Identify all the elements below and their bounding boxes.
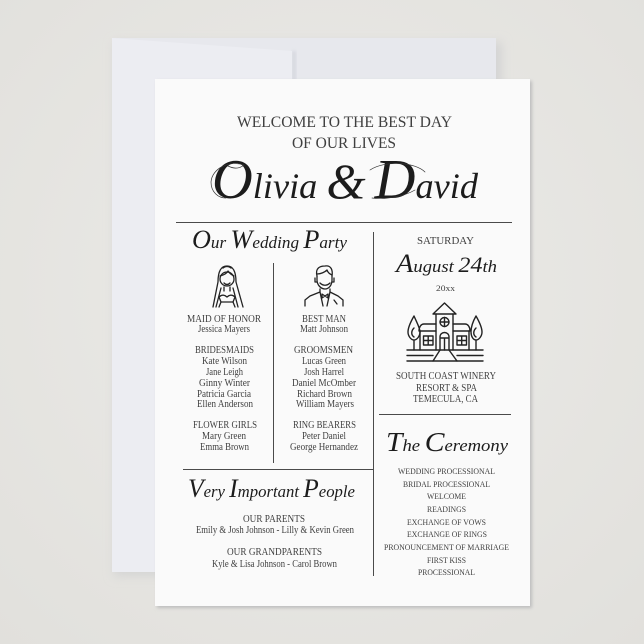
column: bride's party: Patricia Garcia (197, 389, 252, 400)
column: groom's party: William Mayers (296, 399, 354, 410)
heading: august 24th: August 24th (394, 249, 497, 278)
column: bride's party (187, 314, 261, 453)
panel: date and venue (394, 236, 497, 405)
list: ceremony order: EXCHANGE OF VOWS (407, 517, 486, 527)
column: groom's party: Richard Brown (297, 389, 352, 400)
column: groom's party (290, 314, 359, 453)
text: parents and grandparents: Kyle & Lisa Johnson - Carol Brown (212, 559, 337, 570)
text: venue address: RESORT & SPA (416, 383, 478, 394)
list: ceremony order: PROCESSIONAL (418, 567, 475, 577)
column: bride's party: Emma Brown (200, 442, 249, 453)
list: ceremony order: BRIDAL PROCESSIONAL (403, 479, 490, 489)
column: groom's party: BEST MAN (302, 314, 346, 325)
text: parents and grandparents: OUR GRANDPARENTS (227, 547, 322, 558)
heading: couple names: Olivia & David (212, 149, 479, 211)
icon: winery building (407, 303, 483, 361)
title: welcome: WELCOME TO THE BEST DAY (237, 114, 452, 131)
text: venue address (396, 371, 496, 405)
title: welcome (237, 114, 452, 152)
heading: our wedding party: Our Wedding Party (192, 225, 347, 254)
heading: the ceremony: The Ceremony (386, 427, 508, 457)
column: bride's party: Kate Wilson (202, 356, 247, 367)
column: groom's party: Daniel McOmber (292, 378, 357, 389)
column: groom's party: Josh Harrel (304, 367, 344, 378)
envelope (112, 38, 502, 576)
text: year: 20xx (436, 283, 456, 293)
column: bride's party: Jessica Mayers (198, 324, 250, 335)
text: venue address: SOUTH COAST WINERY (396, 371, 496, 382)
column: bride's party: Ellen Anderson (197, 399, 253, 410)
text: parents and grandparents (196, 514, 354, 570)
panel: the ceremony (384, 427, 509, 577)
list: ceremony order: WELCOME (427, 491, 466, 501)
column: groom's party: Lucas Green (302, 356, 346, 367)
list: ceremony order: READINGS (427, 504, 466, 514)
heading: very important people: Very Important People (188, 474, 355, 503)
list: ceremony order: EXCHANGE OF RINGS (407, 529, 487, 539)
column: groom's party: Matt Johnson (300, 324, 348, 335)
panel: very important people (188, 474, 355, 570)
column: groom's party: Peter Daniel (302, 431, 346, 442)
text: venue address: TEMECULA, CA (413, 394, 479, 405)
column: bride's party: BRIDESMAIDS (195, 345, 254, 356)
list: ceremony order (384, 466, 509, 577)
list: ceremony order: FIRST KISS (427, 555, 466, 565)
divider lines (176, 222, 512, 576)
column: bride's party: Mary Green (202, 431, 246, 442)
text: saturday: SATURDAY (417, 236, 474, 247)
column: groom's party: GROOMSMEN (294, 345, 353, 356)
text: parents and grandparents: OUR PARENTS (243, 514, 305, 525)
wedding program card (155, 79, 532, 608)
column: bride's party: MAID OF HONOR (187, 314, 261, 325)
column: bride's party: Ginny Winter (199, 378, 251, 389)
icon: groom (305, 266, 343, 306)
icon: bride (213, 266, 243, 307)
column: bride's party: FLOWER GIRLS (193, 420, 257, 431)
list: ceremony order: PRONOUNCEMENT OF MARRIAGE (384, 542, 509, 552)
text: parents and grandparents: Emily & Josh Johnson - Lilly & Kevin Green (196, 525, 354, 536)
list: ceremony order: WEDDING PROCESSIONAL (398, 466, 495, 476)
column: bride's party: Jane Leigh (206, 367, 243, 378)
column: groom's party: RING BEARERS (293, 420, 356, 431)
column: groom's party: George Hernandez (290, 442, 359, 453)
panel: wedding party (187, 225, 359, 453)
title: welcome: OF OUR LIVES (292, 135, 396, 152)
